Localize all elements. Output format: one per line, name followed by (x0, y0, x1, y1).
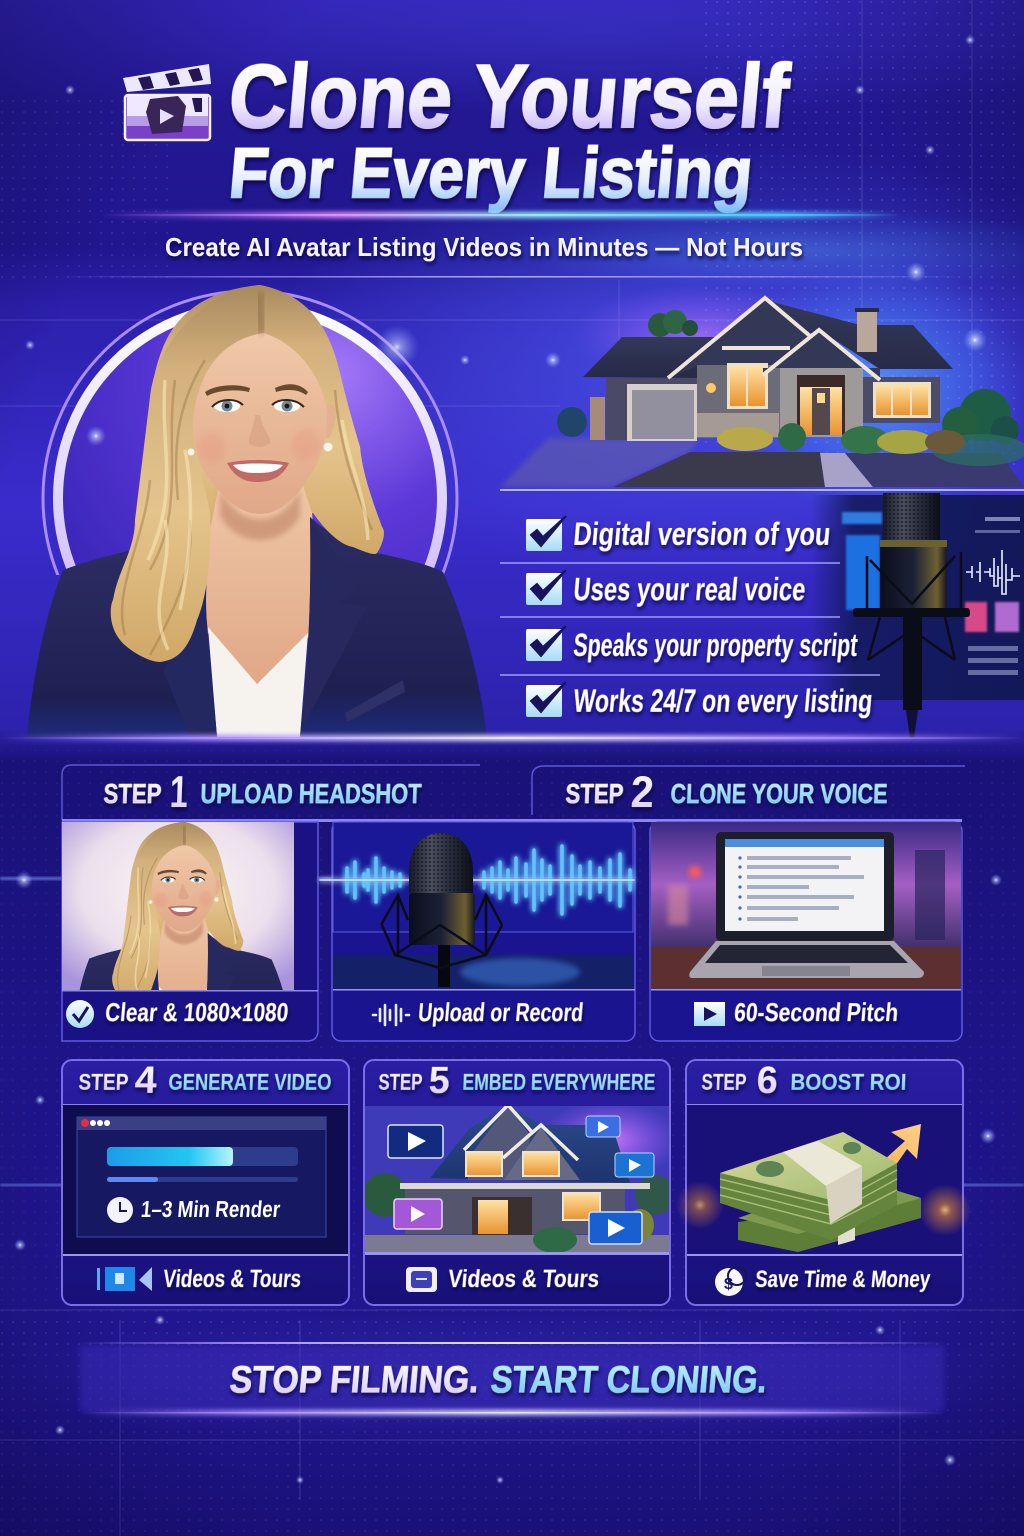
step header: step 1: 1 (169, 768, 189, 817)
decorative rule above checklist (500, 489, 1024, 491)
video tile: medium blue (615, 1153, 654, 1177)
step header: step 6 (701, 1060, 907, 1102)
checklist row 3 (526, 626, 859, 663)
render progress window: 1–3 Min Render (140, 1196, 281, 1222)
checklist row 2: Uses your real voice (572, 571, 807, 607)
panel: script on laptop (650, 822, 962, 1041)
caption: videos and tours: Videos & Tours (447, 1265, 600, 1293)
video tile: large navy (388, 1125, 443, 1158)
banner text: start cloning: START CLONING. (489, 1359, 769, 1401)
caption: save time and money: $ (724, 1276, 733, 1293)
ring behind avatar (42, 290, 458, 575)
caption: save time and money: Save Time & Money (754, 1266, 932, 1293)
title line: Clone Yourself: Clone Yourself (225, 46, 794, 147)
panel: headshot (62, 822, 318, 1041)
bushes (717, 423, 965, 454)
step header: step 5: STEP (378, 1069, 423, 1095)
step header: step 1 (62, 765, 480, 820)
decorative section rule (0, 735, 1024, 741)
step header: step 1: UPLOAD HEADSHOT (200, 778, 422, 809)
caption: videos and tours (406, 1265, 600, 1293)
step header: step 2: 2 (630, 768, 655, 817)
render progress window (77, 1117, 326, 1237)
step header: step 4: GENERATE VIDEO (168, 1069, 332, 1095)
video tile: large blue (589, 1212, 642, 1244)
step header: step 2: STEP (565, 778, 624, 809)
microphone and studio screens (810, 493, 1024, 738)
checklist row 2 (526, 570, 807, 607)
walls, garage and entry (590, 330, 940, 441)
laptop scene (651, 822, 961, 990)
caption: upload or record (373, 997, 585, 1027)
sound waveform (320, 846, 634, 914)
caption: videos and tours (97, 1265, 302, 1293)
chimney (855, 308, 879, 352)
step header: step 6: 6 (756, 1060, 778, 1102)
step header: step 2: CLONE YOUR VOICE (670, 778, 888, 809)
checklist row 4: Works 24/7 on every listing (572, 683, 874, 719)
step header: step 6: BOOST ROI (790, 1069, 907, 1095)
video tile: small blue (586, 1116, 620, 1137)
house illustration (500, 298, 1024, 487)
decorative rule under subtitle (60, 276, 964, 278)
closing banner (80, 1342, 944, 1415)
step header: step 5: 5 (428, 1060, 450, 1102)
panel: generate video (62, 1060, 349, 1305)
microphone (853, 493, 970, 738)
title underline (100, 212, 900, 218)
video tile: purple (394, 1199, 442, 1229)
caption: save time and money (715, 1266, 932, 1296)
caption: videos and tours: Videos & Tours (162, 1265, 302, 1293)
title line: For Every Listing: For Every Listing (226, 134, 756, 213)
caption: clear headshot (66, 997, 290, 1028)
studio microphone (381, 833, 502, 987)
gable trim (668, 298, 880, 380)
steps row two (62, 1060, 971, 1305)
step header: step 4: STEP (78, 1069, 129, 1095)
house scene with video tiles (363, 1100, 680, 1253)
banner text: stop filming: STOP FILMING. (228, 1359, 481, 1401)
checklist row 1 (526, 516, 832, 552)
caption: clear headshot: Clear & 1080×1080 (104, 997, 290, 1027)
lawn and driveway (500, 438, 1024, 487)
subtitle: Create AI Avatar Listing Videos in Minutes — Not Hours (165, 232, 803, 262)
cash stacks with rising arrow (720, 1124, 921, 1252)
step header: step 5 (378, 1060, 656, 1102)
feature checklist (500, 516, 880, 719)
step header: step 5: EMBED EVERYWHERE (462, 1069, 656, 1095)
headshot photo (62, 822, 294, 990)
steps row one (62, 765, 965, 1041)
caption: upload or record: Upload or Record (417, 997, 585, 1027)
hero: avatar in glowing ring (27, 285, 487, 737)
avatar portrait (27, 285, 487, 737)
trees (557, 310, 1024, 466)
panel: embed everywhere (363, 1060, 680, 1305)
panel: boost ROI (676, 1060, 971, 1305)
icon: clapperboard with play button (123, 64, 211, 140)
panel: voice recording (320, 822, 635, 1041)
step header: step 4 (78, 1060, 332, 1102)
step header: step 4: 4 (134, 1060, 157, 1102)
title block (100, 46, 900, 262)
step header: step 2 (532, 766, 965, 817)
checklist row 3: Speaks your property script (572, 627, 859, 663)
caption: 60-second pitch (694, 997, 900, 1027)
studio screens (810, 495, 1024, 700)
caption: 60-second pitch: 60-Second Pitch (733, 997, 900, 1027)
step header: step 1: STEP (103, 778, 162, 809)
step header: step 6: STEP (701, 1069, 747, 1095)
checklist row 1: Digital version of you (572, 516, 832, 552)
roofs (583, 298, 953, 378)
checklist row 4 (526, 682, 874, 719)
